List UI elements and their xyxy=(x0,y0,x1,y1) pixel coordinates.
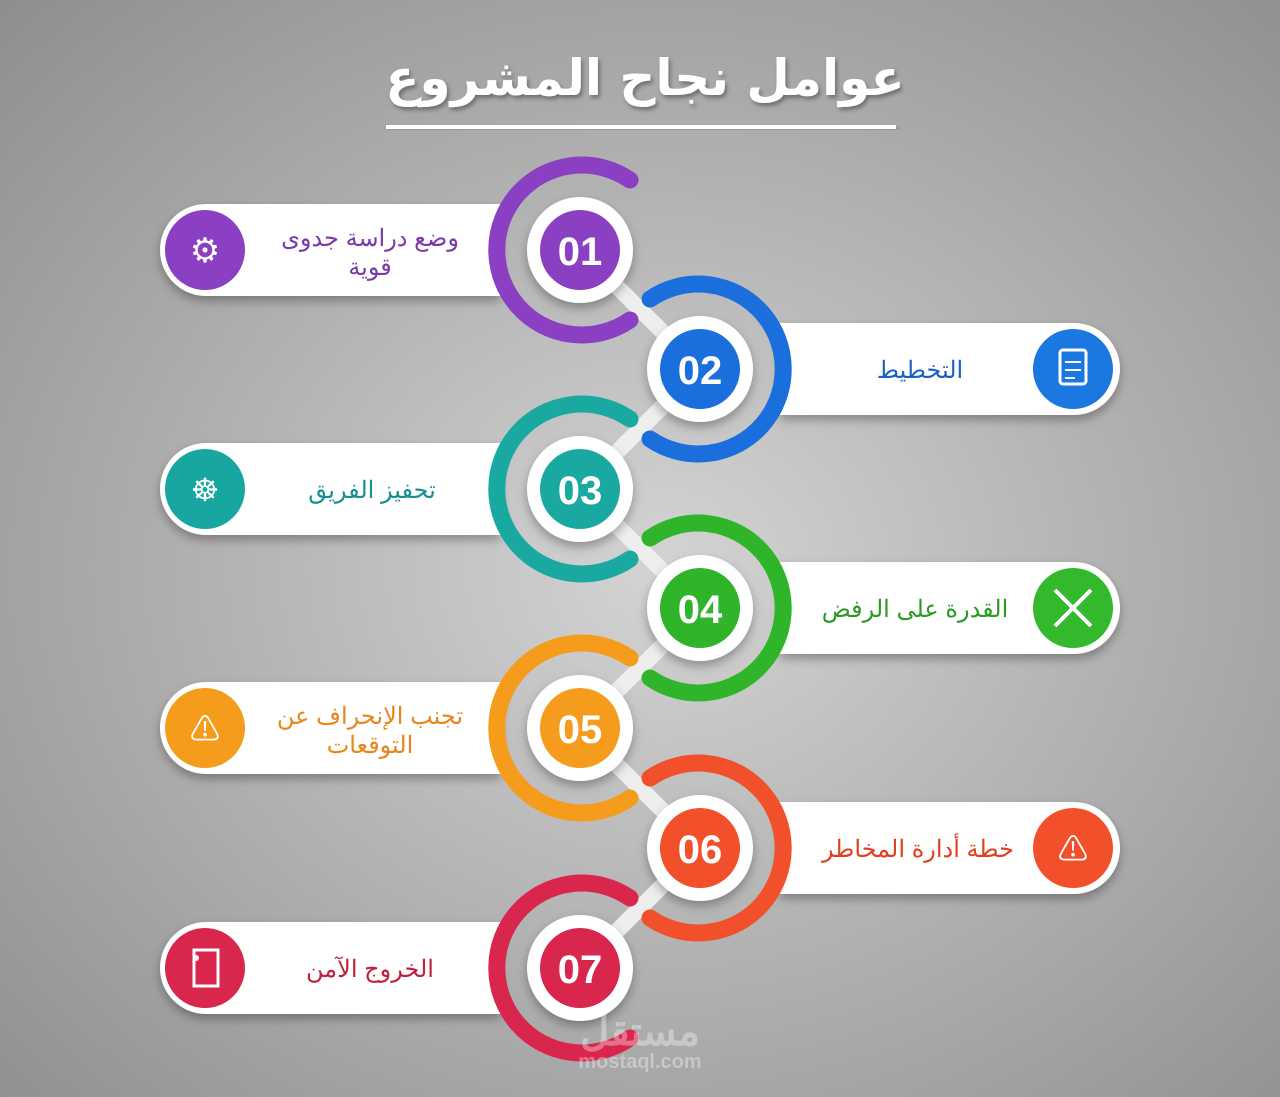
item 01: وضع دراسة جدوى xyxy=(281,225,459,252)
item 03: تحفيز الفريق xyxy=(308,477,436,504)
item 05: التوقعات xyxy=(327,732,413,759)
item 05: ⚠ xyxy=(190,714,220,747)
title underline xyxy=(386,125,896,129)
item 02: 02 xyxy=(678,349,722,393)
watermark: mostaql.com xyxy=(578,1051,702,1073)
item 06: خطة أدارة المخاطر xyxy=(821,832,1014,863)
connectors xyxy=(580,250,700,968)
item 03: 03 xyxy=(558,469,602,513)
item 06: ⚠ xyxy=(1058,834,1088,867)
item 03: ☸ xyxy=(191,472,219,508)
item 06 xyxy=(647,763,1120,933)
item 07 xyxy=(160,883,633,1053)
item 04 xyxy=(647,523,1120,693)
watermark xyxy=(578,1010,702,1073)
title: عوامل نجاح المشروع xyxy=(385,49,905,108)
item 06: 06 xyxy=(678,828,722,872)
watermark: مستقل xyxy=(580,1010,700,1054)
item 01: ⚙ xyxy=(190,232,220,270)
item 05: تجنب الإنحراف عن xyxy=(277,703,463,730)
item 02: التخطيط xyxy=(877,357,963,384)
item 01 xyxy=(160,165,633,335)
item 04: القدرة على الرفض xyxy=(822,596,1008,623)
item 05: 05 xyxy=(558,708,602,752)
item 02 xyxy=(647,284,1120,454)
item 01: 01 xyxy=(558,230,602,274)
item 07: الخروج الآمن xyxy=(306,955,434,983)
item 01: قوية xyxy=(348,254,392,281)
item 05 xyxy=(160,643,633,813)
item 04: 04 xyxy=(678,588,723,632)
item 07: 07 xyxy=(558,948,602,992)
item 03 xyxy=(160,404,633,574)
